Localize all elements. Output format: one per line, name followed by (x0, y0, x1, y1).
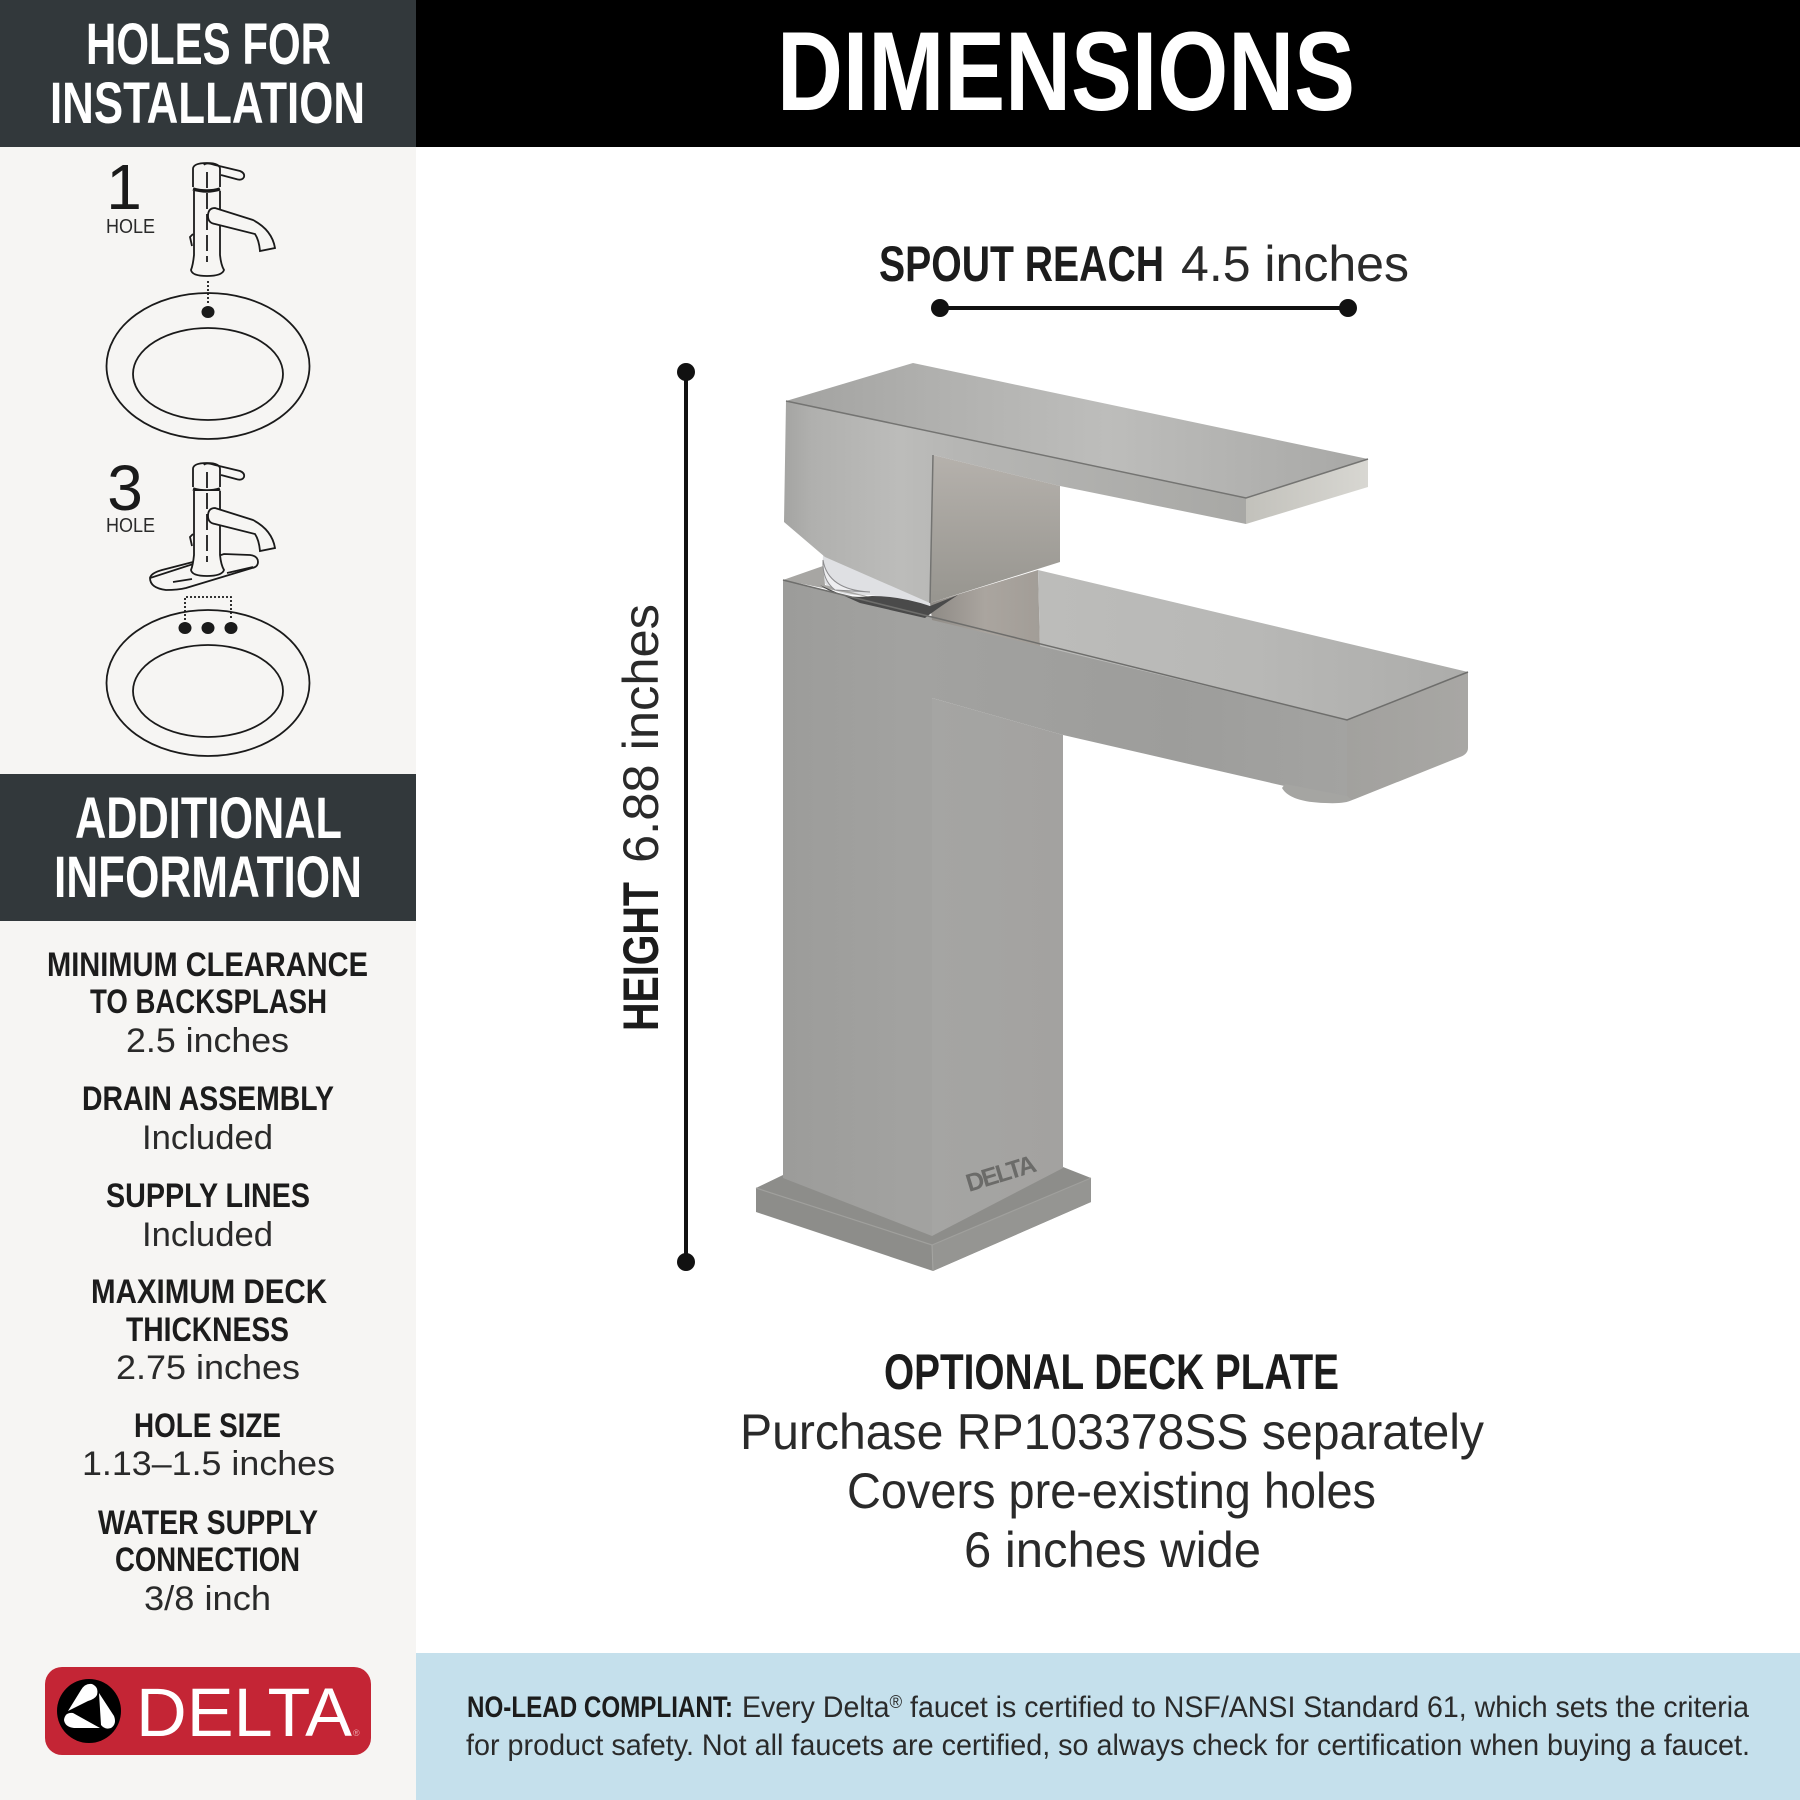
text block: additional information list (47, 946, 368, 1618)
heading: holes for installation: INSTALLATION (50, 71, 365, 136)
item: minimum clearance (47, 946, 368, 1060)
item: water supply connection: CONNECTION (115, 1541, 300, 1579)
label: height: 6.88 inches (613, 604, 669, 863)
heading: holes for installation (50, 12, 365, 136)
faucet engraved logo: DELTA (963, 1150, 1040, 1198)
label: 1 hole: HOLE (106, 216, 155, 238)
icon: faucet line drawing (190, 163, 275, 276)
faucet spout edges (783, 580, 1468, 720)
icon: faucet line drawing with deck plate (190, 463, 275, 576)
faucet chrome stem highlight (823, 560, 870, 592)
faucet spout top (1038, 570, 1468, 720)
heading: additional information (54, 786, 362, 910)
item: drain assembly: DRAIN ASSEMBLY (82, 1080, 334, 1118)
item: hole size: 1.13–1.5 inches (82, 1445, 335, 1483)
faucet body right face (932, 698, 1063, 1236)
item: supply lines: Included (142, 1216, 273, 1254)
text block: no-lead compliant: ® (889, 1692, 902, 1712)
text block: optional deck plate: 6 inches wide (964, 1522, 1261, 1578)
faucet handle block right (930, 455, 1060, 603)
icon: 3 hole installation (106, 452, 310, 756)
faucet dark reflection (820, 585, 958, 618)
text block: no-lead compliant: Every Delta (742, 1691, 897, 1724)
item: water supply connection: 3/8 inch (144, 1580, 271, 1618)
label: spout reach: 4.5 inches (1181, 236, 1409, 292)
faucet body left face and spout side (783, 580, 1347, 1236)
logo: Delta: DELTA (136, 1674, 352, 1751)
item: supply lines: SUPPLY LINES (106, 1177, 310, 1215)
icon: 1 hole installation (106, 151, 310, 439)
item: maximum deck thickness: 2.75 inches (116, 1349, 300, 1387)
label: 1 hole: 1 (106, 151, 142, 223)
panel: no-lead compliant note (416, 1653, 1800, 1800)
item: water supply connection (98, 1504, 318, 1618)
heading: additional information: INFORMATION (54, 845, 362, 910)
text block: optional deck plate: OPTIONAL DECK PLATE (884, 1344, 1339, 1400)
logo: Delta (45, 1667, 371, 1755)
label: 3 hole (106, 452, 155, 537)
heading: additional information: ADDITIONAL (75, 786, 342, 851)
arrow: height dimension line (677, 363, 695, 1271)
icon: sink with one hole (106, 281, 310, 439)
panel: holes for installation header (0, 0, 416, 147)
faucet spout front (1347, 672, 1468, 801)
text block: no-lead compliant: NO-LEAD COMPLIANT: (467, 1691, 733, 1724)
icon: sink with three holes (106, 597, 310, 756)
label: height (613, 604, 669, 1031)
item: maximum deck thickness: MAXIMUM DECK (91, 1273, 327, 1311)
icon: deck plate (150, 554, 258, 590)
product photo: faucet (756, 363, 1468, 1271)
faucet deck edge (783, 566, 932, 610)
text block: optional deck plate: Purchase RP103378SS separately (740, 1404, 1484, 1460)
item: drain assembly: Included (142, 1119, 273, 1157)
label: 3 hole: 3 (107, 452, 143, 524)
faucet handle edges (786, 401, 1368, 603)
item: minimum clearance: 2.5 inches (126, 1022, 289, 1060)
faucet handle tip (1246, 459, 1368, 524)
faucet base (756, 1167, 1091, 1271)
text block: optional deck plate (740, 1344, 1484, 1578)
title: DIMENSIONS (777, 9, 1355, 134)
faucet aerator (1282, 784, 1352, 803)
heading: holes for installation: HOLES FOR (86, 12, 331, 77)
logo: Delta: ® (353, 1728, 360, 1738)
item: hole size (82, 1407, 335, 1483)
item: minimum clearance: TO BACKSPLASH (90, 983, 327, 1021)
label: 1 hole (106, 151, 155, 238)
text block: no-lead compliant: faucet is certified to NSF/ANSI Standard 61, which sets the criteria (902, 1691, 1749, 1724)
text block: no-lead compliant (466, 1691, 1750, 1762)
faucet spout reflection (930, 570, 1040, 646)
label: height: HEIGHT (613, 882, 669, 1031)
item: maximum deck thickness: THICKNESS (126, 1311, 289, 1349)
item: hole size: HOLE SIZE (134, 1407, 281, 1445)
item: minimum clearance: MINIMUM CLEARANCE (47, 946, 368, 984)
panel: additional information header (0, 774, 416, 921)
item: drain assembly (82, 1080, 334, 1157)
arrow: spout reach dimension line (931, 299, 1357, 317)
item: supply lines (106, 1177, 310, 1254)
text block: optional deck plate: Covers pre-existing holes (847, 1463, 1376, 1519)
label: spout reach (879, 236, 1409, 292)
faucet stem (822, 555, 932, 606)
label: 3 hole: HOLE (106, 515, 155, 537)
text block: no-lead compliant: for product safety. Not all faucets are certified, so always check for certification when buying a faucet. (466, 1729, 1750, 1762)
panel: sidebar background (0, 0, 416, 1800)
faucet handle top (786, 363, 1368, 498)
panel: dimensions header (416, 0, 1800, 147)
item: water supply connection: WATER SUPPLY (98, 1504, 318, 1542)
label: spout reach: SPOUT REACH (879, 236, 1164, 292)
faucet handle block left (784, 401, 1246, 603)
item: maximum deck thickness (91, 1273, 327, 1387)
